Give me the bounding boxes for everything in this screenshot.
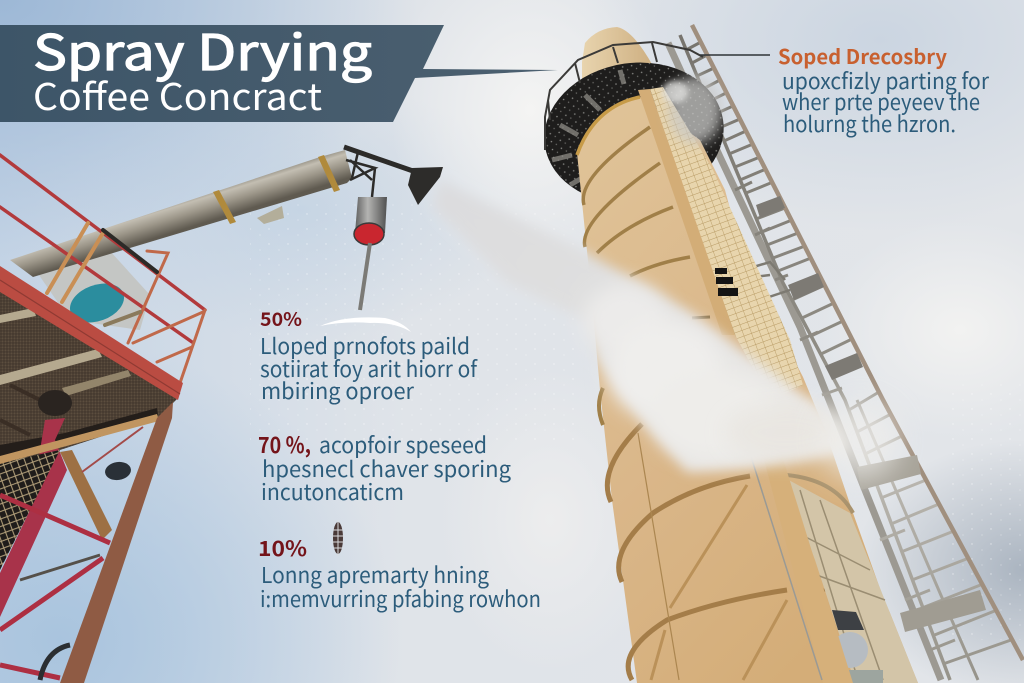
dish lamp	[104, 460, 132, 482]
ladder landing platforms	[756, 196, 986, 632]
glazed lower section	[783, 477, 918, 683]
white curved tip	[320, 317, 411, 332]
red beam shadow line	[0, 280, 180, 394]
canister	[355, 197, 387, 233]
gray rod	[20, 555, 100, 580]
stat: 70%: acopfoir speseed	[319, 428, 487, 460]
stat: 50%: mbiring oproer	[261, 374, 414, 406]
stat: 50%: 50%	[260, 305, 302, 332]
stat: 70%: incutoncaticm	[261, 475, 404, 507]
stat: 10%	[258, 533, 541, 614]
callout: top right: upoxcfizly parting for	[782, 64, 989, 96]
black hose	[40, 645, 70, 680]
stat: 10%: 10%	[258, 533, 307, 563]
rod	[360, 243, 370, 310]
dark under deck	[0, 285, 178, 465]
net panel	[0, 450, 60, 570]
nozzle truss	[344, 147, 413, 197]
scaffold platform	[0, 150, 352, 683]
stat: 10%: i:memvurring pfabing rowhon	[260, 582, 541, 614]
dark support beams	[0, 385, 72, 435]
red outlet	[354, 223, 384, 245]
cage windows	[715, 268, 738, 296]
plain tan column beside cage	[638, 89, 735, 335]
left structural member	[668, 43, 941, 680]
feed pipe	[10, 150, 352, 277]
title banner	[0, 14, 558, 122]
subtitle: Coffee Concract	[33, 67, 322, 121]
stat: 50%	[260, 305, 478, 406]
stat: 70%	[258, 428, 512, 507]
ties between member and rail	[735, 182, 955, 650]
stat: 10%: Lonng apremarty hning	[261, 558, 490, 590]
tan cross beam	[0, 414, 159, 464]
title: Spray Drying	[33, 14, 372, 85]
callout: top right: holurng the hzron.	[783, 107, 956, 139]
stat: 70%: hpesnecl chaver sporing	[262, 452, 512, 484]
thin red rod	[82, 427, 143, 472]
outer rail	[692, 25, 1023, 660]
mid rail	[857, 400, 978, 680]
deck planks	[0, 308, 131, 396]
stat: 50%: Lloped prnofots paild	[260, 329, 470, 361]
steam at tower top	[662, 76, 722, 144]
spray nozzle assembly	[320, 147, 443, 332]
dark shadow beneath deck	[0, 408, 158, 462]
callout: top right: wher prte peyeev the	[782, 85, 980, 117]
tower body	[577, 97, 918, 683]
red column	[0, 418, 67, 617]
black spray disc	[535, 51, 733, 215]
vertical column strip	[757, 433, 853, 683]
brown diagonal	[60, 450, 112, 540]
ladder cage panel on tower	[650, 87, 803, 400]
spray cone	[408, 167, 443, 205]
red braces	[0, 495, 110, 678]
spray tower	[535, 27, 918, 683]
icon: feather	[332, 521, 344, 556]
callout: top right: Soped Drecosbry	[778, 41, 948, 70]
inner rail	[680, 35, 950, 680]
stat: 70%: 70 %,	[258, 428, 311, 460]
callout: top right	[778, 41, 989, 139]
brackets	[745, 262, 790, 300]
teal vessel	[65, 277, 129, 329]
main brown column	[60, 402, 173, 683]
upper railing	[0, 155, 205, 383]
railing around disc	[545, 42, 703, 150]
ladder tower structure	[668, 25, 1023, 680]
cable	[733, 400, 822, 680]
smoke plume from nozzle	[433, 180, 900, 480]
tower ring bands	[577, 97, 915, 680]
ladder rungs	[686, 42, 1011, 664]
red deck beam	[0, 266, 183, 400]
tower dome	[582, 27, 655, 85]
leader line to callout	[700, 54, 770, 56]
machinery behind railing	[30, 240, 150, 330]
stat: 50%: sotiirat foy arit hiorr of	[260, 352, 478, 384]
